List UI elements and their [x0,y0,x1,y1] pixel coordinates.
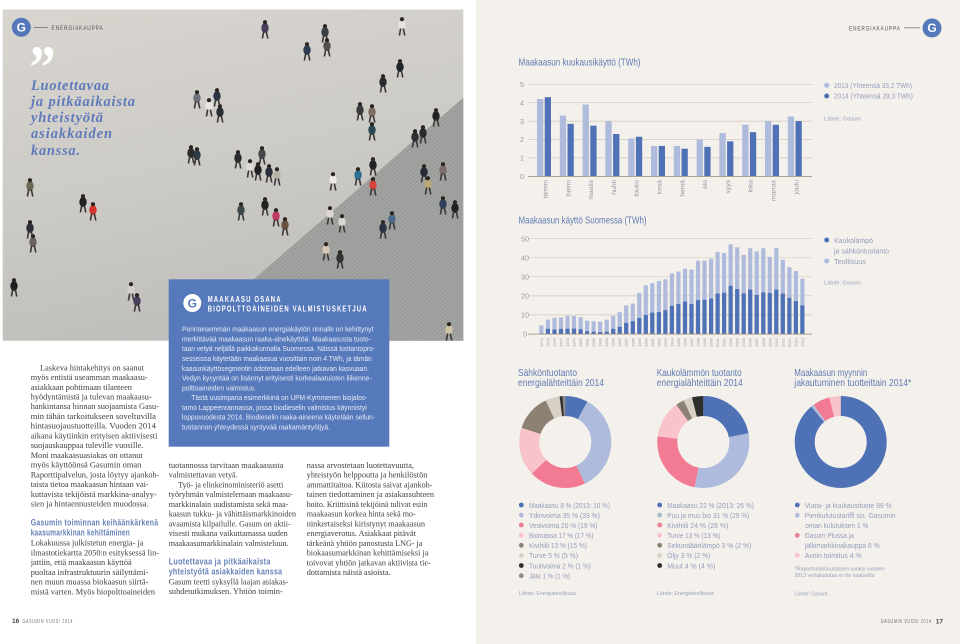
footer: left page: 16 [12,618,20,625]
bar chart: annual consumption 1974–2014: 20 [521,292,529,301]
bar chart: annual consumption 1974–2014: 1980 [578,337,583,347]
text column 2: markkinalain uudistamista sekä maa- [169,499,289,509]
box body text: tuotannon yhteydessä syntyvää raakamäntyöljyä. [182,422,330,431]
chart heading: annual use in Finland: Maakaasun käyttö Suomessa (TWh) [518,214,646,226]
text column 1: ilmastotiekartta 2050:n esityksessä lin- [31,547,159,557]
text column 1: Lokakuussa julkistetun energia- ja [31,538,144,548]
text column 1: asiakkaan pohtimaan tilanteen [31,382,133,392]
bar chart: annual consumption 1974–2014 [521,234,812,347]
text column 2: työryhmän valmistelemaan maakaasu- [169,489,293,499]
legend: monthly chart: 2014 (Yhteensä 29,3 TWh) [834,92,913,101]
text column 3: maakaasun korkea hinta sekä mo- [307,509,416,519]
bar chart: annual consumption 1974–2014: 2011 [780,338,785,347]
box body text: loppuvuodesta 2014. Biodieselin raaka-aineena käytetään sellun- [182,413,375,422]
subheading: long-term cooperation [169,555,283,576]
subheading: long-term cooperation: Luotettavaa ja pitkäaikaista [169,555,271,566]
bar chart: monthly consumption: 1 [520,154,524,163]
text column 1: Raporttipalvelun, josta löytyy ajankoh- [31,469,160,479]
bar chart: monthly consumption: tammi [542,180,550,199]
text column 1: sien ja hintaennusteiden muodossa. [31,498,149,508]
subheading: long-term cooperation: yhteistyötä asiakkaiden kanssa [169,565,283,576]
bar chart: annual consumption 1974–2014: 10 [521,311,529,320]
bar chart: annual consumption 1974–2014: 2005 [741,337,746,347]
text column 3: yhteistyön helppoutta ja henkilöstön [307,470,428,480]
text column 3: nassa arvostetaan luotettavuutta, [307,460,414,470]
donut chart: electricity [529,406,601,478]
right page background [476,0,960,644]
pull quote: ja pitkäaikaista [29,94,135,110]
donut legend: district heating: Turve 13 % (13 %) [667,531,721,540]
bar chart: annual consumption 1974–2014: 1991 [650,337,655,347]
bar chart: annual consumption 1974–2014: 50 [521,234,529,244]
bar chart: monthly consumption: huhti [611,180,618,195]
text column 1: Laskeva hintakehitys on saanut [40,362,145,372]
box body text [182,325,375,431]
donut legend: sales by product: 2013 vertailudataa ei ole saatavilla [794,573,875,579]
donut legend: electricity: Biomassa 17 % (17 %) [529,531,594,540]
donut legend: district heating: Muut 4 % (4 %) [667,561,716,570]
bar chart: annual consumption 1974–2014: 1996 [682,337,688,347]
donut legend: electricity [519,501,610,597]
text column 1: aikana käytiinkin erityisen aktiivisesti [31,430,158,440]
box body text: kaasunkäyttösegmentin odotetaan edelleen jatkavan kasvuaan. [182,364,369,373]
text column 3: ammattitaitoa. Kiitosta saivat ajankoh- [307,480,433,490]
bar chart: annual consumption 1974–2014: 1988 [630,337,635,347]
bar chart: monthly consumption: elo [702,180,709,189]
text column 3: tainen tiedottaminen ja asiakassuhteen [307,489,435,499]
text column 1: kuttavista tekijöistä markkina-analyy- [31,489,157,499]
bar chart: annual consumption 1974–2014: 2002 [722,337,727,347]
bar chart: annual consumption 1974–2014: 1981 [585,337,590,347]
text column 2: avaamista kilpailulle. Gasum on aktii- [169,518,291,528]
text column 1: jattiin, että maakaasun käyttöä [30,557,132,567]
text column 3: hoito. Kriittisinä tekijöinä tulivat esiin [307,499,428,509]
legend: annual chart: ja sähköntuotanto [833,246,889,256]
footer: left page [12,618,73,625]
donut heading: district heating: energialähteittäin 2014 [657,377,743,389]
donut heading: sales by product [793,367,911,389]
donut legend: sales by product: Lähde: Gasum [794,591,828,597]
donut legend: electricity: Tuulivoima 2 % (1 %) [529,561,591,570]
text column 1: myös käyttöönsä Gasumin oman [31,460,142,470]
text column 3 [307,460,435,577]
legend: annual chart: Lähde: Gasum [824,280,861,286]
bar chart: monthly consumption: maalis [588,179,595,200]
donut legend: electricity: Maakaasu 8 % (2013: 10 %) [529,501,610,510]
icon: logo [183,294,201,312]
bar chart: monthly consumption: 2 [520,135,524,144]
bar chart: annual consumption 1974–2014: 1998 [696,337,700,347]
legend: monthly chart: 2013 (Yhteensä 33,2 TWh) [834,81,912,90]
logo and section label: left page: G [17,20,26,34]
bar chart: annual consumption 1974–2014: 2010 [774,337,779,347]
footer: right page: GASUMIN VUOSI 2014 [881,619,932,625]
text column 3: tärkeänä yhtiön panostusta LNG- ja [307,538,423,548]
bar chart: annual consumption 1974–2014: 2000 [709,337,714,347]
text column 3: ninkertaiseksi kiristynyt maakaasun [307,518,426,528]
legend: monthly chart [824,81,913,122]
text column 3: dottamista näistä asioista. [307,567,391,577]
bar chart: annual consumption 1974–2014: 2013 [793,337,798,347]
donut legend: district heating [657,501,754,597]
box body text: Perinteisemmän maakaasun energiakäytön rinnalle on kehittynyt [182,325,374,334]
donut legend: district heating: Sekundäärilämpö 3 % (2 %) [667,541,752,550]
text column 1: puoltaa infrastruktuurin säilyttämi- [31,567,149,577]
donut heading: electricity [518,367,604,389]
donut legend: sales by product: Gasum Plussa ja [805,531,854,540]
bar chart: annual consumption 1974–2014: 1985 [611,337,616,347]
text column 1: hyödyntämistä ja tulevan maakaasu- [31,392,152,402]
bar chart: annual consumption 1974–2014: 1983 [598,337,603,347]
subheading: spearhead [31,517,159,537]
text column 2: maakaasumarkkinalain valmisteluun. [169,538,288,548]
text column 3: biokaasumarkkinan kehittämiseksi ja [307,548,429,558]
subheading: spearhead: Gasumin toiminnan keihäänkärkenä [31,517,159,528]
bar chart: annual consumption 1974–2014: 2008 [761,337,766,347]
icon: logo: G [188,296,197,310]
donut legend: electricity: Jäte 1 % (1 %) [529,572,570,580]
donut legend: electricity: Turve 5 % (5 %) [529,551,578,560]
bar chart: monthly consumption: 4 [520,98,524,107]
bar chart: annual consumption 1974–2014: 1982 [591,337,596,347]
panel: biofuel info box [169,279,389,447]
bar chart: annual consumption 1974–2014: 1992 [656,337,661,347]
text column 2: valmistettavan vetyä. [169,470,238,480]
bar chart: monthly consumption: heinä [679,180,686,197]
bar chart: monthly consumption: 5 [520,80,524,89]
bar chart: annual consumption 1974–2014: 1994 [669,337,674,347]
text column 2: tuotannossa tarvitaan maakaasusta [169,460,284,470]
donut chart: district heating [667,406,739,478]
bar chart: annual consumption 1974–2014: 1979 [572,337,576,347]
pull quote: Luotettavaa [30,78,109,94]
text column 1: myös entistä useamman maakaasu- [31,372,148,382]
text column 1: min tähän tarkoitukseen soveltuvilla [31,411,156,421]
bar chart: annual consumption 1974–2014: 40 [521,254,529,262]
logo and section label: right page [849,18,942,38]
bar chart: annual consumption 1974–2014: 2003 [728,337,733,347]
text column 2: Gasum teetti syksyllä laajan asiakas- [169,576,289,586]
box body text: Vedyn kysyntää on lisännyt erityisesti korkealaatuisten liikenne- [182,374,372,382]
donut legend: electricity: Vesivoima 20 % (19 %) [529,521,598,530]
pull quote: kanssa. [31,143,80,159]
bar chart: annual consumption 1974–2014: 1993 [663,337,668,347]
bar chart: annual consumption 1974–2014: 1999 [702,337,707,347]
bar chart: annual consumption 1974–2014: 30 [521,272,529,282]
donut legend: district heating: Maakaasu 22 % (2013: 26 %) [667,501,754,510]
pull quote [29,78,135,159]
bar chart: annual consumption 1974–2014: 2009 [767,337,772,347]
bar chart: monthly consumption: kesä [656,180,664,194]
donut legend: sales by product: Avoin toimitus 4 % [805,551,862,560]
text column 2: suhdetutkimuksen. Yhtiön toimin- [169,586,283,596]
box body text: taan vetyä neljällä paikkakunnalla Suomessa. Näissä tuotantopro- [182,344,375,353]
bar chart: annual consumption 1974–2014: 1987 [624,337,629,347]
bar chart: monthly consumption: marras [770,179,778,201]
bar chart: annual consumption 1974–2014: 2006 [748,337,753,347]
bar chart: annual consumption 1974–2014: 2004 [735,337,740,347]
bar chart: annual consumption 1974–2014: 1977 [558,337,564,347]
text column 3: energiaverotus. Asiakkaat pitävät [307,528,417,538]
box heading: MAAKAASU OSANA [208,294,282,304]
logo and section label: left page: ENERGIAKAUPPA [52,26,104,32]
donut legend: sales by product: oman kulutuksen 1 % [805,521,869,530]
chart heading: monthly use: Maakaasun kuukausikäyttö (TWh) [518,56,640,68]
donut heading: district heating: Kaukolämmön tuotanto [657,367,742,379]
donut legend: electricity: Lähde: Energiateollisuus [519,591,576,597]
bar chart: monthly consumption: touko [634,180,641,197]
bar chart: annual consumption 1974–2014: 0 [523,330,527,339]
donut legend: sales by product: *Raportointimuutoksen vuoksi vuoden [794,566,884,572]
text column 1: taista tietoa maakaasun hintaan vai- [31,479,149,489]
bar chart: annual consumption 1974–2014: 1995 [676,337,681,347]
text column 1: mistä varten. Myös biopolttoaineiden [31,586,156,596]
text column 1 [30,362,160,596]
box body text: sesseissa käytetään maakaasua vuosittain noin 4 TWh, ja tämän [182,354,372,363]
donut legend: sales by product: jälkimarkkinakauppa 6 % [804,541,880,550]
bar chart: monthly consumption: syys [725,179,732,194]
logo and section label: right page: G [927,21,937,35]
text column 2: visesti mukana vaikuttamassa uuden [169,528,288,538]
donut legend: district heating: Öljy 3 % (2 %) [667,551,711,560]
box body text: polttoaineiden valmistus. [182,383,256,392]
bar chart: annual consumption 1974–2014: 2012 [787,337,792,347]
subheading: spearhead: kaasumarkkinan kehittäminen [31,526,130,537]
text column 1: Moni maakaasuasiakas on ottanut [31,450,143,460]
text column 1: nen muun muassa biokaasun siirtä- [31,577,149,587]
bar chart: monthly consumption: 3 [520,117,524,126]
legend: annual chart: Kaukolämpö [834,236,873,245]
footer: left page: GASUMIN VUOSI 2014 [22,619,73,625]
footer: right page: 17 [936,618,943,625]
pull quote: asiakkaiden [31,126,112,142]
bar chart: annual consumption 1974–2014: 2014 [800,337,805,347]
bar chart: monthly consumption: helmi [565,180,572,196]
legend: annual chart [824,236,889,286]
text column 1: hintasuojaustuotteilla. Vuoden 2014 [31,421,157,431]
bar chart: monthly consumption: joulu [793,180,800,195]
donut heading: electricity: energialähteittäin 2014 [518,377,604,389]
text column 1: hankintansa hinnan suojaamista Gasu- [31,401,159,411]
donut heading: electricity: Sähköntuotanto [518,367,577,379]
text column 2: kaasun tukku- ja vähittäismarkkinoiden [169,509,297,519]
box body text: Tästä uusimpana esimerkkinä on UPM-Kymmenen biojalos- [191,393,368,402]
bar chart: monthly consumption: 0 [520,172,524,181]
bar chart: annual consumption 1974–2014: 1976 [552,337,557,347]
donut legend: district heating: Kivihiili 24 % (26 %) [667,521,729,530]
legend: annual chart: Teollisuus [834,257,866,266]
bar chart: annual consumption 1974–2014: 1984 [604,337,609,347]
bar chart: annual consumption 1974–2014: 1975 [545,337,550,347]
panel: aerial photo of people on a square [3,10,463,341]
donut legend: sales by product: Pienkulutustariffi sis. Gasumin [805,511,896,520]
bar chart: annual consumption 1974–2014: 1997 [689,337,694,347]
donut chart: sales by product [805,406,877,478]
donut heading: sales by product: Maakaasun myynnin [794,367,867,379]
bar chart: monthly consumption: loka [748,180,755,192]
bar chart: annual consumption 1974–2014: 2001 [715,337,720,347]
donut legend: district heating: Puu ja muu bio 31 % (29 %) [667,511,750,520]
logo and section label: right page: ENERGIAKAUPPA [849,26,901,32]
bar chart: annual consumption 1974–2014: 1986 [617,337,622,347]
pull quote: yhteistyötä [29,110,103,126]
donut legend: sales by product: Vuosi- ja kuukausituote 89 % [805,501,892,510]
legend: monthly chart: Lähde: Gasum [824,116,861,122]
donut heading: sales by product: jakautuminen tuotteittain 2014* [793,377,911,389]
donut heading: district heating [657,367,743,389]
box body text: merkittävää maakaasun raaka-ainekäyttöä. Maakaasusta tuote- [182,334,371,344]
bar chart: annual consumption 1974–2014: 1978 [565,337,570,347]
icon: quotation mark: ” [30,34,56,102]
box heading: BIOPOLTTOAINEIDEN VALMISTUSKETJUA [208,304,368,314]
bar chart: annual consumption 1974–2014: 1989 [637,337,642,347]
donut legend: electricity: Ydinvoima 35 % (33 %) [529,511,600,520]
box heading [208,294,368,314]
bar chart: monthly consumption [520,80,812,201]
donut legend: district heating: Lähde: Energiateollisuus [657,591,714,597]
text column 3: toivovat yhtiön jatkavan aktiivista tie- [307,558,431,568]
donut legend: sales by product [794,501,896,597]
text column 1: suojauskauppaa tuleville vuosille. [31,440,143,450]
bar chart: annual consumption 1974–2014: 2007 [754,337,759,347]
text column 2 [169,460,297,596]
text column 2: Työ- ja elinkeinoministeriö asetti [178,480,284,490]
bar chart: annual consumption 1974–2014: 1990 [643,337,648,347]
box body text: tamo Lappeenrannassa, jossa biodieselin valmistus käynnistyi [182,403,367,412]
bar chart: annual consumption 1974–2014: 1974 [539,337,544,347]
logo and section label: left page [12,18,103,37]
donut legend: electricity: Kivihiili 13 % (15 %) [529,541,587,550]
